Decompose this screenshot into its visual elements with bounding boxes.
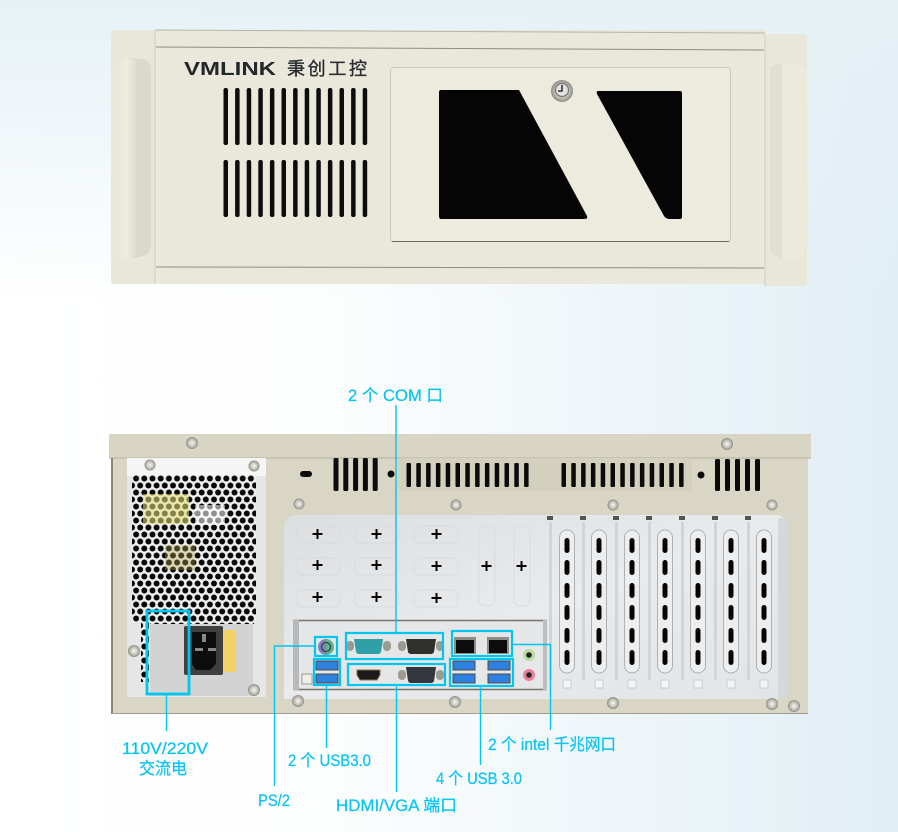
- callout: 2 intel gigabit LAN: 2 个 intel 千兆网口: [488, 735, 616, 754]
- COM ports: [346, 639, 444, 654]
- left handle: [115, 58, 151, 258]
- callout: HDMI/VGA: HDMI/VGA 端口: [336, 796, 457, 815]
- HDMI and VGA ports: [357, 667, 444, 683]
- chassis body: [111, 30, 807, 286]
- callout: AC power: [122, 611, 208, 778]
- right handle: [770, 64, 807, 259]
- knockout crosses: [312, 529, 526, 603]
- rear view of rack chassis: [109, 434, 811, 714]
- USB 3.0 ports quad: [453, 661, 510, 683]
- expansion metal panel: [284, 515, 788, 699]
- callout: PS/2: PS/2: [258, 792, 290, 810]
- PS/2 port: [318, 639, 334, 655]
- door lock screw: [551, 80, 573, 102]
- callout: PS/2: [258, 637, 337, 810]
- callout: AC power: 110V/220V: [122, 740, 208, 758]
- callout: 4 USB 3.0: 4 个 USB 3.0: [436, 769, 522, 788]
- callout: 2 USB3.0: 2 个 USB3.0: [288, 751, 371, 770]
- logo: [184, 59, 367, 79]
- callout: 2 intel gigabit LAN: [452, 631, 616, 754]
- knockout outlines: [296, 526, 530, 607]
- rear vents: [300, 458, 760, 491]
- small internal connector: [302, 674, 312, 684]
- USB 3.0 ports stacked left: [316, 661, 338, 683]
- I/O shield: [293, 620, 547, 690]
- drive door: [390, 68, 730, 242]
- audio jacks: [523, 649, 535, 681]
- gigabit LAN ports: [454, 637, 509, 654]
- callout: HDMI/VGA: [336, 664, 457, 815]
- power supply unit: [127, 458, 266, 697]
- front view of rack chassis: [111, 30, 807, 286]
- callout: 4 USB 3.0: [436, 659, 522, 788]
- rear body: [109, 434, 811, 714]
- PCI expansion slots: [547, 516, 772, 688]
- callout: 2 USB3.0: [288, 659, 371, 770]
- rear screws: [128, 437, 800, 712]
- logo: VMLINK: [184, 59, 276, 79]
- logo: 秉创工控: [287, 59, 367, 79]
- callout: AC power: 交流电: [139, 759, 187, 778]
- front vents: [224, 88, 367, 217]
- callout: 2 COM ports: [346, 386, 443, 659]
- power socket: [184, 626, 236, 675]
- callout: 2 COM ports: 2 个 COM 口: [348, 386, 443, 405]
